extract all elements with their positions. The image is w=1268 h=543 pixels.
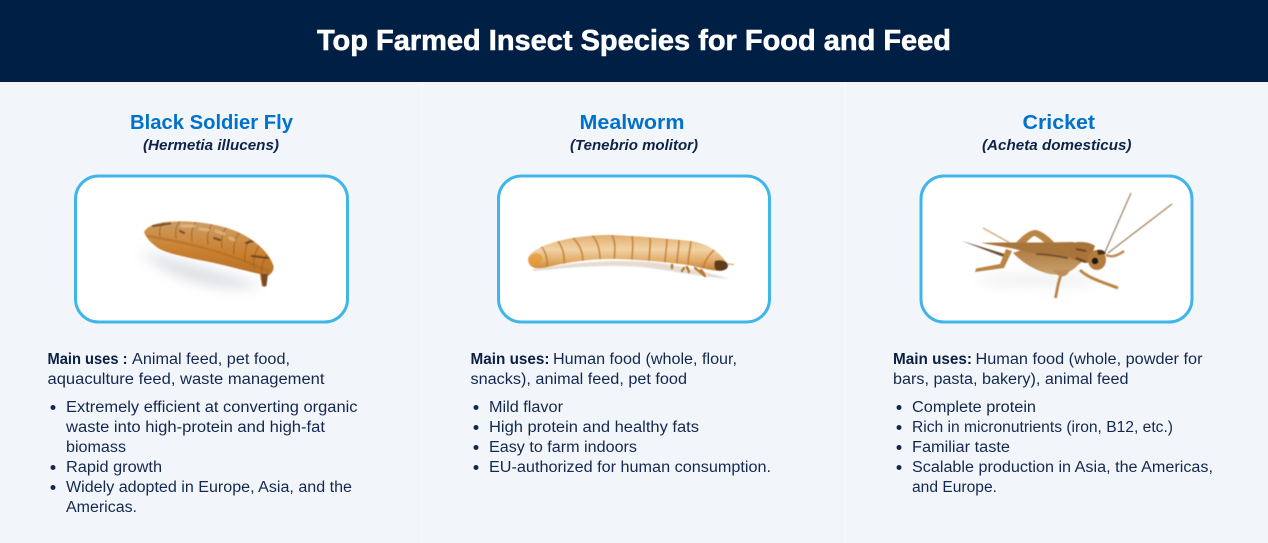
bullet list: Familiar taste bbox=[912, 439, 1010, 456]
main uses text: Animal feed, pet food, bbox=[132, 351, 290, 368]
bullet list: Easy to farm indoors bbox=[489, 439, 637, 456]
heading: black soldier fly: Black Soldier Fly bbox=[130, 111, 294, 134]
heading: cricket: Cricket bbox=[1022, 111, 1095, 134]
bullet list: Mild flavor bbox=[489, 399, 563, 416]
main uses text: Main uses: bbox=[470, 351, 550, 368]
thorax and head bbox=[1069, 242, 1095, 263]
cerci and ovipositor bbox=[962, 241, 1008, 258]
main uses text: bars, pasta, bakery), animal feed bbox=[893, 371, 1128, 388]
main uses text bbox=[470, 351, 737, 388]
image frame: black soldier fly larva bbox=[76, 176, 348, 322]
image frame: cricket bbox=[921, 176, 1192, 322]
bullet list: Extremely efficient at converting organic bbox=[66, 399, 358, 416]
bullet list: Widely adopted in Europe, Asia, and the bbox=[66, 479, 352, 496]
bullet list: Scalable production in Asia, the Americas, bbox=[912, 459, 1213, 476]
bullet list bbox=[474, 399, 771, 476]
scientific name: tenebrio molitor: (Tenebrio molitor) bbox=[570, 138, 698, 154]
title: Top Farmed Insect Species for Food and Feed bbox=[317, 25, 951, 57]
bullet list: Rapid growth bbox=[66, 459, 162, 476]
panel: cricket bbox=[893, 111, 1213, 496]
main uses text: Main uses : bbox=[48, 351, 128, 368]
bullet list: EU-authorized for human consumption. bbox=[489, 459, 771, 476]
image frame: mealworm larva bbox=[498, 176, 770, 322]
main uses text bbox=[893, 351, 1202, 388]
main uses text: aquaculture feed, waste management bbox=[48, 371, 325, 388]
bullet list: Americas. bbox=[66, 499, 137, 516]
bullet list: High protein and healthy fats bbox=[489, 419, 699, 436]
panel: black soldier fly bbox=[48, 111, 358, 516]
legs bbox=[1106, 251, 1124, 256]
main uses text: Human food (whole, powder for bbox=[976, 351, 1202, 368]
main uses text: Main uses: bbox=[893, 351, 972, 368]
scientific name: acheta domesticus: (Acheta domesticus) bbox=[982, 138, 1132, 154]
bullet list: Complete protein bbox=[912, 399, 1036, 416]
bullet list: and Europe. bbox=[912, 479, 997, 496]
scientific name: hermetia illucens: (Hermetia illucens) bbox=[143, 138, 279, 154]
heading: mealworm: Mealworm bbox=[580, 111, 684, 134]
bullet list bbox=[50, 399, 358, 516]
bullet list: Rich in micronutrients (iron, B12, etc.) bbox=[912, 419, 1173, 436]
panel: mealworm bbox=[470, 111, 771, 476]
main uses text: Human food (whole, flour, bbox=[553, 351, 737, 368]
title banner bbox=[0, 0, 1268, 82]
bullet list: waste into high-protein and high-fat bbox=[65, 419, 326, 436]
bullet list bbox=[896, 399, 1213, 496]
bullet list: biomass bbox=[66, 439, 126, 456]
antennae bbox=[1105, 193, 1131, 252]
main uses text bbox=[48, 351, 325, 388]
body bbox=[1013, 243, 1089, 275]
hind leg bbox=[1016, 230, 1054, 246]
wing bbox=[981, 242, 1077, 257]
main uses text: snacks), animal feed, pet food bbox=[470, 371, 687, 388]
